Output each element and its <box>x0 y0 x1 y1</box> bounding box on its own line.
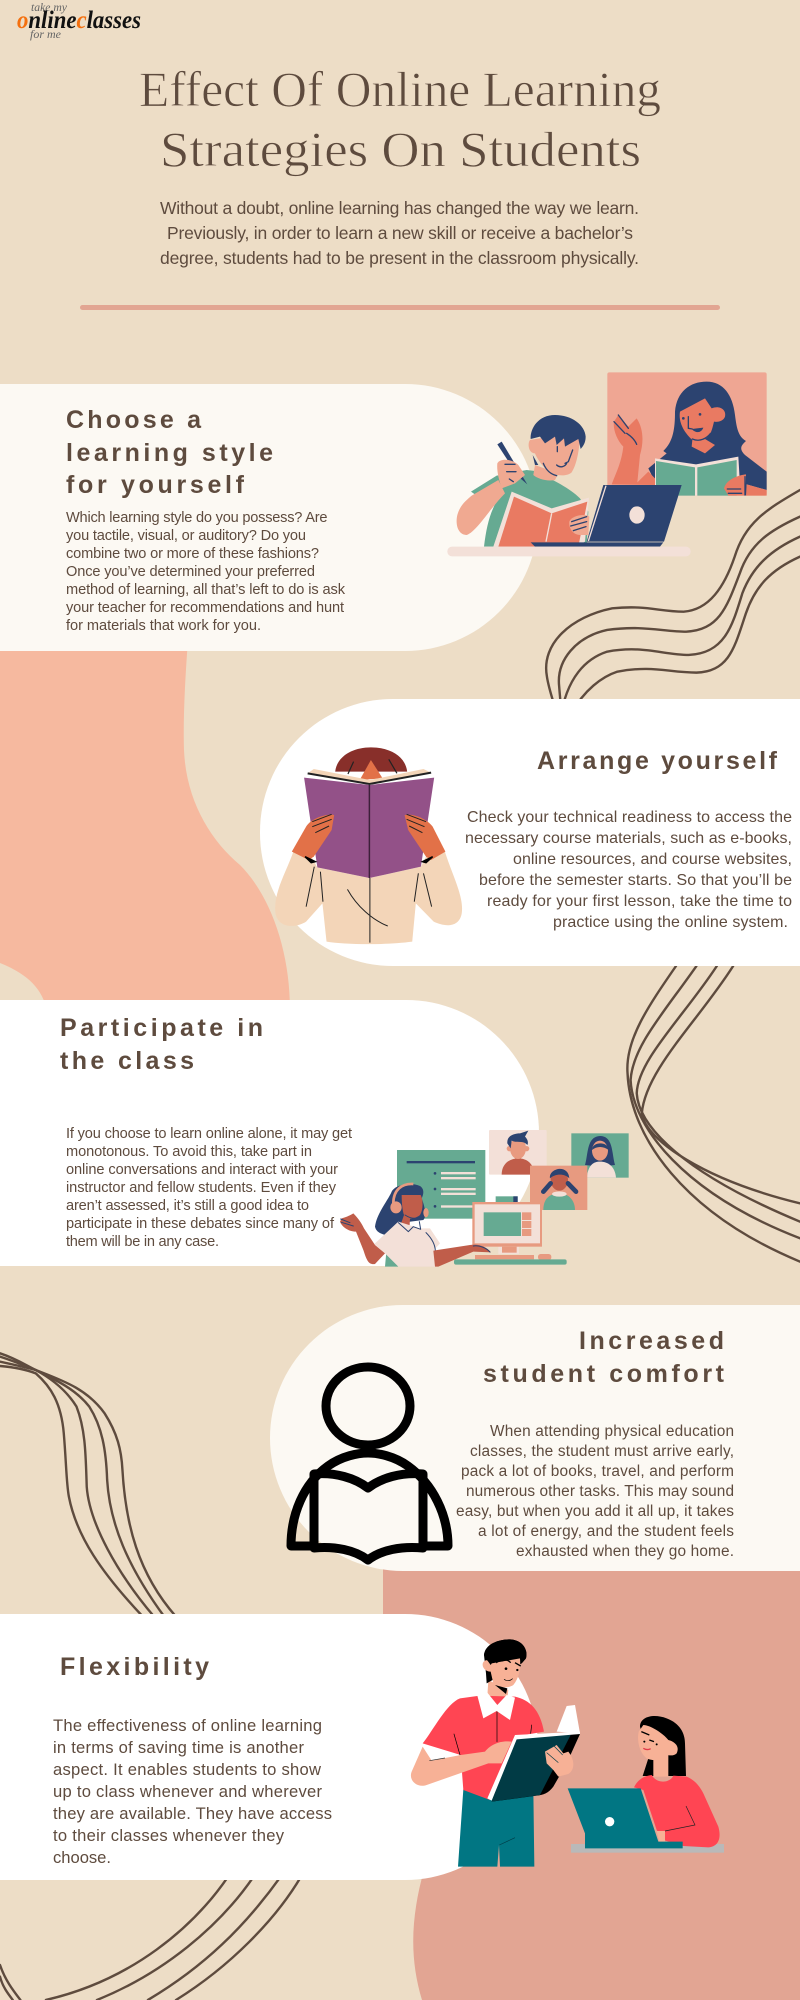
card background 4 <box>270 1305 800 1571</box>
intro text <box>160 198 639 268</box>
body text 5: choose. <box>53 1848 111 1867</box>
card background 2 <box>260 699 800 966</box>
body text 1: you tactile, visual, or auditory? Do you <box>66 528 306 544</box>
logo <box>17 0 141 41</box>
title <box>139 61 661 177</box>
body text 5: they are available. They have access <box>53 1804 332 1823</box>
illustration: online class with portraits <box>340 1130 629 1267</box>
heading 1: for yourself <box>66 471 245 499</box>
intro text: Without a doubt, online learning has changed the way we learn. <box>160 198 639 218</box>
body text 4: numerous other tasks. This may sound <box>466 1483 734 1500</box>
body text 4: a lot of energy, and the student feels <box>478 1523 734 1540</box>
card background 3 <box>0 1000 539 1266</box>
heading 4: student comfort <box>483 1360 725 1388</box>
body text 3: If you choose to learn online alone, it may get <box>66 1126 352 1142</box>
peach background blob <box>0 640 290 1010</box>
body text 1 <box>66 510 346 634</box>
body text 3 <box>66 1126 352 1250</box>
card background 1 <box>0 384 538 651</box>
wavy lines left middle <box>0 1353 176 1617</box>
body text 5: to their classes whenever they <box>53 1826 285 1845</box>
heading 1: Choose a <box>66 406 202 434</box>
body text 3: online conversations and interact with your <box>66 1162 338 1178</box>
body text 5 <box>53 1716 332 1867</box>
body text 2: ready for your first lesson, take the time to <box>487 893 792 910</box>
illustration: man with book and woman with laptop <box>411 1639 724 1867</box>
body text 3: instructor and fellow students. Even if they <box>66 1180 337 1196</box>
body text 4: easy, but when you add it all up, it takes <box>456 1503 734 1520</box>
illustration: person reading purple book <box>275 747 462 944</box>
heading 1 <box>66 406 273 499</box>
logo: take my <box>31 0 68 14</box>
heading 3: Participate in <box>60 1014 263 1042</box>
logo: for me <box>30 27 62 41</box>
salmon background blob <box>383 1560 800 2000</box>
body text 4: classes, the student must arrive early, <box>470 1443 734 1460</box>
body text 4: pack a lot of books, travel, and perform <box>461 1463 734 1480</box>
body text 4: exhausted when they go home. <box>516 1543 734 1560</box>
body text 2: online resources, and course websites, <box>513 851 792 868</box>
intro text: Previously, in order to learn a new skill or receive a bachelor’s <box>167 223 633 243</box>
body text 1: Once you’ve determined your preferred <box>66 564 315 580</box>
intro text: degree, students had to be present in the classroom physically. <box>160 248 639 268</box>
heading 1: learning style <box>66 439 273 467</box>
panel: participate in the class <box>0 1000 539 1266</box>
body text 2 <box>465 809 792 931</box>
body text 2: practice using the online system. <box>553 914 788 931</box>
wavy lines top right <box>546 490 800 720</box>
body text 1: method of learning, all that’s left to do is ask <box>66 582 346 598</box>
panel: choose a learning style <box>0 384 538 651</box>
body text 4 <box>456 1423 734 1560</box>
body text 2: before the semester starts. So that you’ll be <box>479 872 792 889</box>
body text 1: for materials that work for you. <box>66 618 261 634</box>
body text 5: up to class whenever and wherever <box>53 1782 322 1801</box>
icon: person reading outline <box>291 1367 448 1560</box>
body text 1: Which learning style do you possess? Are <box>66 510 328 526</box>
body text 5: in terms of saving time is another <box>53 1738 304 1757</box>
heading 3 <box>60 1014 263 1075</box>
panel: arrange yourself <box>260 699 800 966</box>
body text 2: Check your technical readiness to access the <box>467 809 792 826</box>
body text 3: monotonous. To avoid this, take part in <box>66 1144 312 1160</box>
body text 4: When attending physical education <box>490 1423 734 1440</box>
title: Effect Of Online Learning <box>139 61 661 117</box>
heading 3: the class <box>60 1047 194 1075</box>
wavy lines bottom <box>0 1877 301 2000</box>
heading 4: Increased <box>579 1327 724 1355</box>
logo: onlineclasses <box>17 7 141 34</box>
wavy lines right middle <box>627 966 800 1262</box>
body text 1: combine two or more of these fashions? <box>66 546 319 562</box>
body text 2: necessary course materials, such as e-books, <box>465 830 792 847</box>
heading 4 <box>483 1327 725 1388</box>
body text 3: participate in these debates since many of <box>66 1216 335 1232</box>
panel: flexibility <box>0 1614 538 1880</box>
card background 5 <box>0 1614 538 1880</box>
heading 2: Arrange yourself <box>537 747 778 775</box>
body text 3: them will be in any case. <box>66 1234 219 1250</box>
panel: increased student comfort <box>270 1305 800 1571</box>
body text 3: aren’t assessed, it’s still a good idea to <box>66 1198 309 1214</box>
body text 1: your teacher for recommendations and hunt <box>66 600 344 616</box>
divider bar <box>80 305 720 310</box>
body text 5: aspect. It enables students to show <box>53 1760 322 1779</box>
title: Strategies On Students <box>160 121 641 177</box>
body text 5: The effectiveness of online learning <box>53 1716 322 1735</box>
heading 5: Flexibility <box>60 1653 209 1681</box>
illustration: students on video call <box>447 372 767 556</box>
